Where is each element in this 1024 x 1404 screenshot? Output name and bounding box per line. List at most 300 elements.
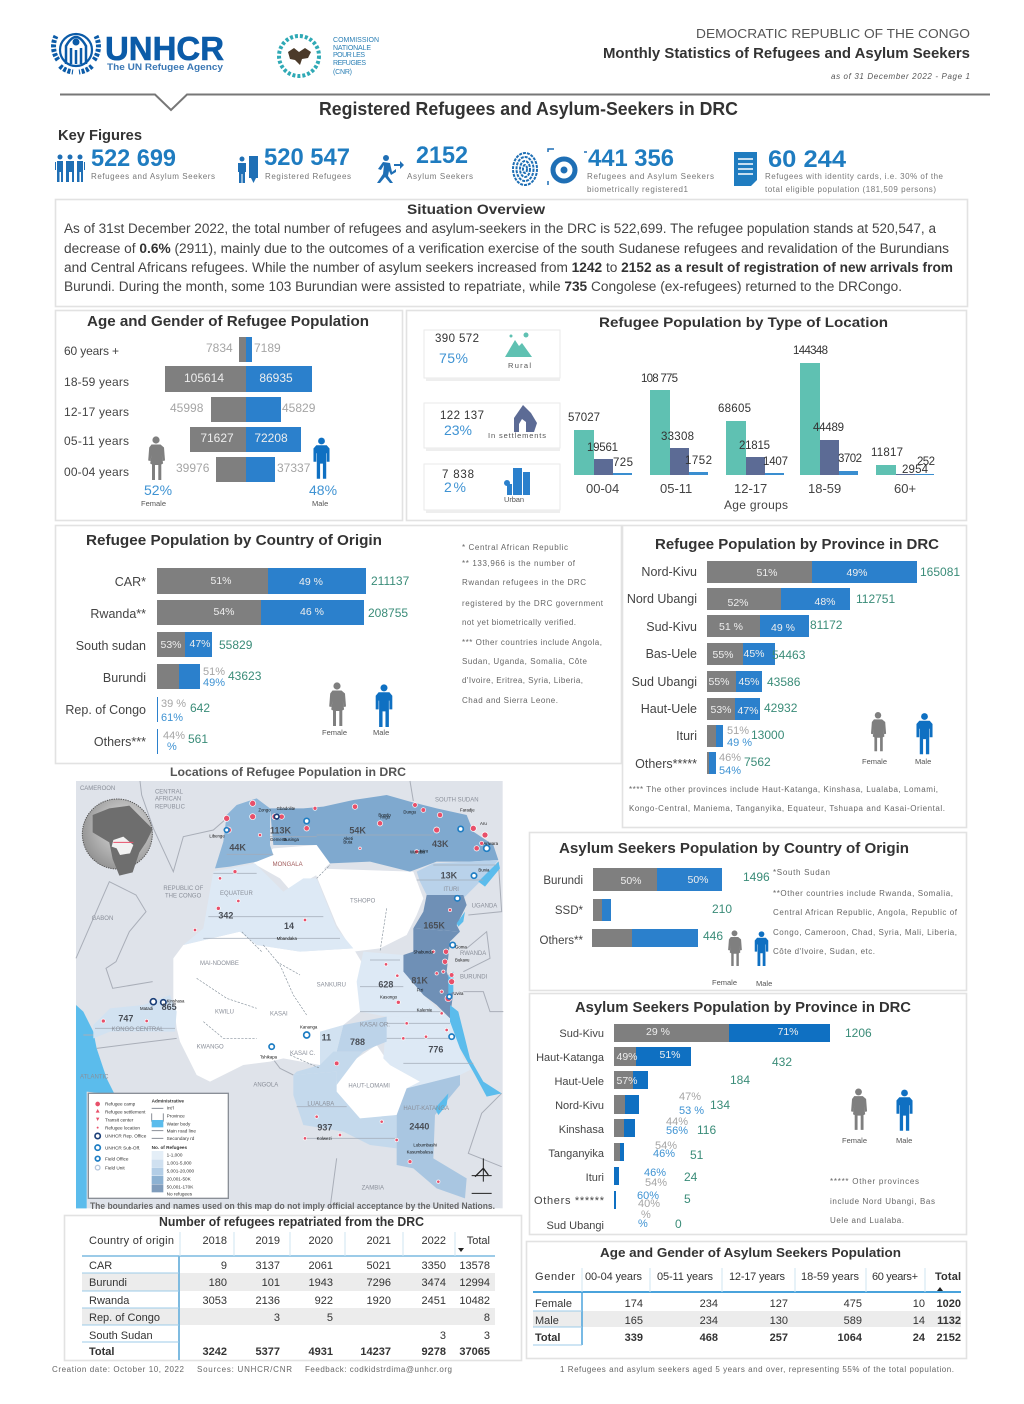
bar chart: province [627,561,960,777]
logo: UNHCR: UNHCR [105,30,224,67]
table: Country of origin [89,1235,174,1247]
key figure: asylum: 2152 [416,142,468,169]
province: Sud Ubangi [215,798,273,868]
card: settlements: In settlements [488,431,546,440]
panel: asylum seekers by country [530,832,966,990]
icon: buildings [504,468,530,495]
refugee counts: 776 [428,1044,443,1054]
table: 5 [327,1312,333,1324]
country and province names: MAI-NDOMBE [200,961,239,967]
map legend: Field Office [105,1156,129,1161]
table: 101 [262,1277,280,1289]
bar chart: 0 [675,1217,682,1231]
bar chart: origin: 44% [163,730,185,742]
province: Lualaba [293,1072,397,1148]
bar chart: province: 51% [756,567,778,579]
pyramid chart: 105614 [184,371,224,385]
bar chart: 1206 [845,1026,872,1040]
bar chart: age groups: Age groups [724,498,788,512]
key figure: asylum [377,142,473,183]
icon: two persons [238,156,258,183]
footnotes: d'Ivoire, Eritrea, Syria, Liberia, [462,676,583,685]
country and province names: HAUT-LOMAMI [348,1084,390,1090]
country and province names: RWANDA [460,951,486,957]
bar chart: origin: 53% [160,639,182,651]
card: urban: Urban [504,495,524,504]
key figure: refugees: 520 547 [264,144,350,171]
bar chart: 432 [772,1055,792,1069]
refugee counts: 11 [322,1032,331,1042]
footnotes: not yet biometrically verified. [462,618,576,627]
bar chart: province: Bas-Uele [646,647,697,661]
header rule with notch [60,94,990,110]
panel: repatriation table [64,1215,522,1360]
country and province names: ANGOLA [253,1083,278,1089]
footnotes: Côte d'Ivoire, Sudan, etc. [773,947,875,956]
heading: Asylum Seekers Population by Province in DRC [575,1000,912,1016]
card: urban: 2% [444,479,466,495]
footnote [830,1177,935,1225]
legend: Male [896,1136,912,1145]
refugee counts: 13K [441,870,458,880]
overview text: Burundi. During the month, some 103 Burundian were assisted to repatriate, while 735 Congolese (ex-refugees) returned to the DRCongo. [64,279,902,294]
legend: Female [862,757,887,766]
pyramid chart: 7834 [206,341,233,355]
bar chart: province: Nord Ubangi [627,592,697,606]
map legend: Water body [167,1122,191,1127]
icon: walking person [377,155,404,183]
country and province names: KWILU [215,1009,234,1015]
key figure: ID cards: Refugees with identity cards, i.e. 30% of the [765,172,944,181]
table: 18-59 years [801,1271,860,1283]
province: Sud-Kivu [403,928,460,1018]
panel: situation overview [56,200,968,306]
logo: CNR [279,36,379,76]
overview text [64,221,953,294]
place names: Lubumbashi [413,1143,437,1148]
country and province names: GABON [92,916,113,922]
bar chart: age groups: 11817 [871,447,903,459]
bar chart: age groups: 21815 [739,440,770,452]
pyramid chart: 86935 [259,371,293,385]
bar chart: province: 13000 [751,728,785,742]
bar chart: age groups: 1407 [763,456,788,468]
bar chart: Kinshasa [559,1124,605,1136]
bar chart: 1496 [743,870,770,884]
place names: Gemena [270,837,287,842]
table: 3137 [256,1260,280,1272]
panel: asylum seekers by province [530,994,966,1234]
bar chart: province: 53% [710,704,732,716]
table: 3053 [203,1295,227,1307]
bar chart: province: Others***** [635,757,697,771]
refugee counts [118,826,458,1133]
bar chart: Others** [540,935,584,947]
place names: Buta [343,839,353,844]
bar chart: province: 46% [719,752,741,764]
bar chart: age groups: 108 775 [641,373,678,385]
table: 127 [770,1298,788,1310]
refugee counts: 628 [378,980,393,990]
legend: Male [373,728,389,737]
table: 1920 [367,1295,391,1307]
bar chart: origin: 54% [213,606,235,618]
table: 14 [913,1315,925,1327]
logo: UNHCR [54,30,224,72]
bar chart: province: 51% [727,725,749,737]
table: 8 [484,1312,490,1324]
lakes [435,862,502,1115]
refugee counts: 937 [317,1123,332,1133]
bar chart: Burundi [543,875,583,887]
heading: Age and Gender of Refugee Population [87,314,369,330]
table: 1020 [937,1298,961,1310]
map legend: 50,001-170K [167,1184,194,1189]
table: South Sudan [89,1330,153,1342]
country and province names: EQUATEUR [220,891,253,897]
bar chart: origin: Others*** [94,735,146,749]
map legend: Int'l [167,1106,174,1111]
bar chart: origin: South sudan [76,639,146,653]
bar chart: age groups: 12-17 [734,481,767,496]
place names: Uvira [453,991,464,996]
header text: Monthly Statistics of Refugees and Asylum Seekers [603,46,970,62]
legend gender shares [141,482,337,508]
province: Kongo Central [93,995,177,1038]
table: 3 [440,1330,446,1342]
country and province names: REPUBLIC [155,804,186,810]
footnotes [773,868,958,956]
panel: type of location [406,310,966,520]
country and province names: ZAMBIA [362,1185,384,1191]
card: settlements: 122 137 [440,410,484,422]
bar chart: origin: 46 % [300,606,324,618]
map legend: 5,001-20,000 [167,1168,195,1173]
icon: female [871,712,886,751]
bar chart: province: Ituri [676,729,697,743]
table: 14237 [360,1346,391,1358]
bar chart: origin [65,568,410,754]
map legend: 20,001-50K [167,1176,192,1181]
bar chart: age groups: 2954 [902,464,929,476]
map legend: 1,001-5,000 [167,1160,192,1165]
bar chart: age groups: 44489 [813,422,844,434]
pyramid chart: 71627 [200,431,234,445]
bar chart: 47% [679,1091,701,1103]
card: urban: 7 838 [442,469,474,481]
bar chart: origin: CAR* [115,575,146,589]
footnote: ***** Other provinces [830,1177,919,1186]
refugee counts: 2440 [409,1121,429,1131]
bar chart: 51% [659,1049,681,1061]
province: Lomami south link [293,1052,363,1085]
title: Registered Refugees and Asylum-Seekers in DRC [319,99,738,119]
key figure: refugees [238,144,351,183]
footnotes: registered by the DRC government [462,599,604,608]
country and province names: KASAI OR. [360,1023,390,1029]
legend gender shares: 52% [144,482,172,498]
header text [603,26,970,81]
table: 3474 [422,1277,446,1289]
table: 37065 [459,1346,490,1358]
place names: Isiro [420,848,429,853]
icon: female [329,682,346,726]
bar chart: % [638,1218,648,1230]
globe inset [82,799,153,876]
bar chart: origin: 39 % [161,698,186,710]
table: 9 [221,1260,227,1272]
country and province names: ITURI [443,887,459,893]
country and province names: ATLANTIC [80,1074,109,1080]
bar chart: Haut-Uele [554,1076,604,1088]
bar chart: Tanganyika [548,1148,605,1160]
country and province names: MONGALA [273,862,303,868]
legend [842,1136,912,1145]
place names: Wamba [410,849,425,854]
bar chart: age groups: 144348 [793,345,828,357]
table: 2061 [309,1260,333,1272]
logo: CNR: (CNR) [333,69,352,76]
overview text: and Central Africans refugees. While the number of asylum seekers increased from 1242 to 2152 as a result of registration of new arrivals from [64,260,953,275]
bar chart: origin: Burundi [103,671,146,685]
bar chart: Nord-Kivu [555,1100,604,1112]
logo: CNR: NATIONALE [333,45,371,52]
legend [862,757,931,766]
table: CAR [89,1260,112,1272]
bar chart: 50% [620,875,642,887]
place names: Kasongo [380,994,398,999]
table: 234 [700,1315,718,1327]
bar chart: province: Sud-Kivu [646,620,697,634]
bar chart: province: 55% [712,649,734,661]
table: 24 [913,1332,926,1344]
bar chart: 57% [616,1075,638,1087]
province: Ituri [417,860,498,898]
bar chart: 29 % [646,1026,670,1038]
icon: male [916,713,933,754]
footnote [629,785,945,813]
table: Female [535,1298,572,1310]
bar chart: province: 48% [814,596,836,608]
footer: credits: Sources: UNHCR/CNR [197,1365,292,1374]
bar chart: origin: % [167,741,177,753]
table: 12-17 years [729,1271,786,1283]
north arrow and scale [472,1158,492,1193]
table: 05-11 years [657,1271,714,1283]
country and province names: LUALABA [307,1102,334,1108]
map legend: Refugee location [105,1125,140,1130]
country and province names: KWANGO [197,1044,224,1050]
key figure: biometric: biometrically registered1 [587,185,689,194]
refugee counts: 165K [423,920,445,930]
overview text: decrease of 0.6% (2911), mainly due to the outcomes of a verification exercise of the south Sudanese refugees and revalidation of the Burundians [64,241,949,256]
country and province names: KASAI C. [290,1051,316,1057]
key figure: biometric: 441 356 [588,145,674,172]
legend gender shares: 48% [309,482,337,498]
table: 9278 [422,1346,446,1358]
country and province names: UGANDA [472,904,497,910]
footnotes: ** 133,966 is the number of [462,559,576,568]
map disclaimer: The boundaries and names used on this map do not imply official acceptance by the United Nations. [90,1201,495,1212]
map legend: No refugees [167,1192,193,1197]
map legend: Refugee camp [105,1102,136,1107]
pyramid chart: 72208 [254,431,288,445]
map legend: Refugee settlement [105,1110,146,1115]
bar chart: province: 43586 [767,675,801,689]
table: 3 [484,1330,490,1342]
key figure: total: 522 699 [91,145,176,172]
footer: credits: Feedback: codkidstrdima@unhcr.org [305,1365,452,1374]
footnotes: **Other countries include Rwanda, Somalia, [773,889,953,898]
map legend [88,1093,228,1198]
province: Nord-Kivu [413,895,467,932]
map legend: UNHCR Sub-Off. [105,1145,140,1150]
place names: Bukavu [455,958,470,963]
pyramid chart: 18-59 years [64,375,129,389]
icon: female [728,930,742,966]
table: 165 [625,1315,643,1327]
place names: Kolwezi [317,1136,332,1141]
icon: eye [548,149,587,185]
place names: Aketi [343,836,353,841]
bar chart: origin: 55829 [219,638,253,652]
place names [140,806,499,1154]
table: 5377 [256,1346,280,1358]
pyramid chart: 39976 [176,461,210,475]
refugee counts: 44K [229,842,246,852]
bar chart: origin: 47% [189,638,211,650]
place names: Mbandaka [277,936,297,941]
bar chart: 50% [687,874,709,886]
bar chart: age groups: 05-11 [660,481,692,496]
key figure: ID cards: total eligible population (181,509 persons) [765,185,936,194]
logo: CNR: POUR LES [333,52,365,59]
ocean and border lines [76,781,503,1208]
bar chart: age groups: 19561 [587,442,618,454]
logo: CNR: REFUGIES [333,60,366,67]
locations: UNHCR offices [150,814,490,1049]
bar chart: origin: 51% [210,575,232,587]
icon: shelters [514,405,537,432]
place names: Tshikapa [260,1054,278,1059]
province: Tanganyika [383,1017,473,1088]
icon: female [148,436,165,480]
table: 2152 [937,1332,961,1344]
footnotes: * Central African Republic [462,543,568,552]
place names: Ariwara [483,841,499,846]
bar chart: origin: 642 [190,701,210,715]
place names: Dungu [403,809,417,814]
refugee counts: 54K [349,826,366,836]
map legend: Secondary rd [167,1136,195,1141]
table: Total [467,1235,490,1247]
panel: asylum seekers age and gender table [526,1242,966,1358]
bar chart: province: 54% [719,765,741,777]
bar chart: age groups: 33308 [661,431,694,443]
table: 2020 [309,1235,333,1247]
bar chart: age groups: 3702 [838,453,862,465]
footnotes: Central African Republic, Angola, Republic of [773,908,958,917]
table: 2021 [367,1235,391,1247]
bar chart: 49% [616,1051,638,1063]
card: rural: 390 572 [435,333,479,345]
bar chart: province: 42932 [764,701,798,715]
table: Gender [535,1271,575,1283]
bar chart: province: Sud Ubangi [632,675,697,689]
footnote: **** The other provinces include Haut-Katanga, Kinshasa, Lualaba, Lomami, [629,785,938,794]
table: 922 [315,1295,333,1307]
country and province names: CENTRAL [155,789,184,795]
footnotes: *South Sudan [773,868,830,877]
footnote: include Nord Ubangi, Bas [830,1197,935,1206]
place names: Ango [380,814,391,819]
bar chart: SSD* [555,905,584,917]
table: 5021 [367,1260,391,1272]
bar chart: province: 7562 [744,755,771,769]
refugee counts: 81K [411,976,428,986]
bar chart: province: 52% [727,597,749,609]
key figure: refugees: Registered Refugees [265,172,351,181]
key figure: biometric: Refugees and Asylum Seekers [587,172,714,181]
legend: Female [322,728,347,737]
panel: refugees by province [622,526,966,828]
place names: Zongo [258,808,271,813]
card: urban [424,464,560,513]
place names: Businga [283,837,300,842]
bar chart: province: 165081 [920,565,960,579]
icon: mountains [505,332,532,357]
table: Rep. of Congo [89,1312,160,1324]
icon: male [896,1090,913,1131]
bar chart: origin: 51% [203,666,225,678]
table: Burundi [89,1277,127,1289]
bar chart: origin: 61% [161,712,183,724]
country and province names: HAUT-KATANGA [403,1106,449,1112]
footnotes: Rwandan refugees in the DRC [462,578,586,587]
legend: Female [842,1136,867,1145]
bar chart: Sud Ubangi [546,1220,604,1232]
place names: Gbadolite [277,806,296,811]
bar chart: 210 [712,902,732,916]
table: 475 [844,1298,862,1310]
table [82,1232,495,1360]
heading: Asylum Seekers Population by Country of Origin [559,841,909,857]
bar chart: age groups: 1752 [685,455,712,467]
card: rural: Rural [508,361,531,370]
table: 2451 [422,1295,446,1307]
place names: Kinshasa [167,998,185,1003]
bar chart: Ituri [586,1172,604,1184]
legend gender shares: Male [312,499,328,508]
pyramid chart: 60 years + [64,344,119,358]
heading: Situation Overview [407,201,545,217]
bar chart: age groups: 725 [613,457,633,469]
heading: Number of refugees repatriated from the DRC [159,1215,424,1229]
refugee counts: 788 [350,1037,365,1047]
bar chart: age groups: 252 [917,456,935,468]
bar chart: province: 55% [708,676,730,688]
table: 468 [700,1332,718,1344]
bar chart: 24 [684,1170,698,1184]
country and province names: THE CONGO [165,894,202,900]
legend: Female [712,978,737,987]
bar chart: Sud-Kivu [559,1028,604,1040]
key figure: ID cards: 60 244 [768,146,847,173]
table: 174 [625,1298,643,1310]
bar chart [534,1024,872,1232]
table: 3242 [203,1346,227,1358]
pyramid chart: 05-11 years [64,434,129,448]
